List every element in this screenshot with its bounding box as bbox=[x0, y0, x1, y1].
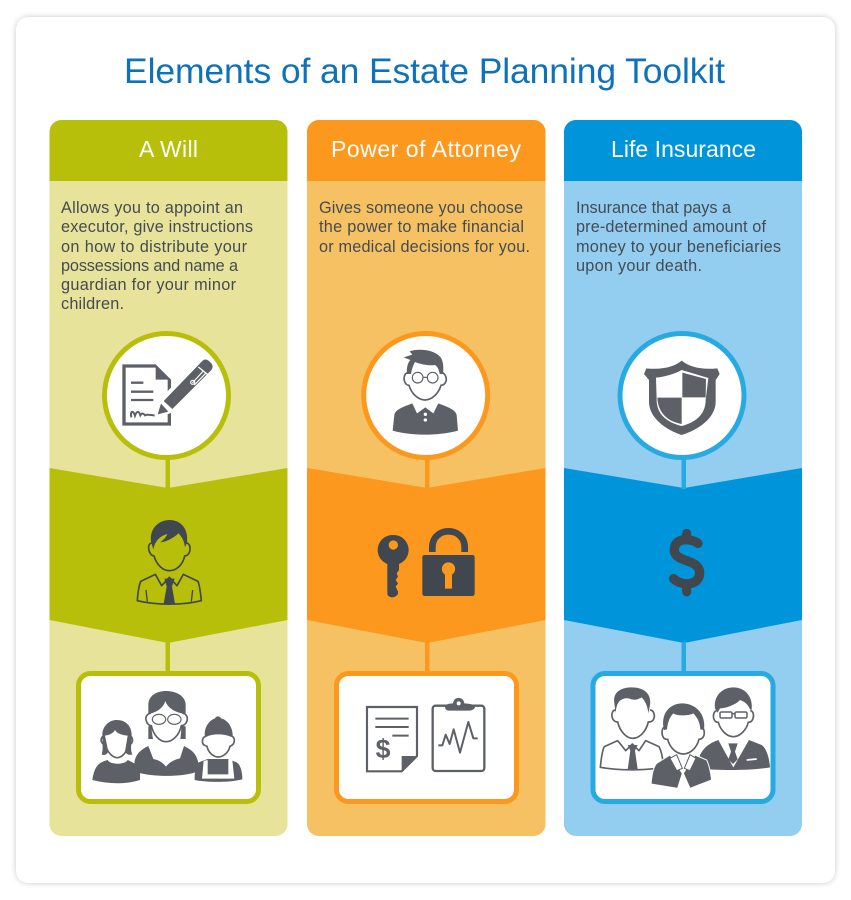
description: life insurance: Insurance that pays a bbox=[576, 199, 732, 217]
icon: padlock bbox=[422, 531, 475, 596]
icon: man with glasses bbox=[393, 350, 458, 435]
panel: life insurance bbox=[564, 120, 802, 836]
header: a will bbox=[50, 120, 288, 181]
header: power of attorney: Power of Attorney bbox=[331, 136, 522, 162]
title: Elements of an Estate Planning Toolkit bbox=[124, 51, 725, 91]
description: life insurance: money to your beneficiaries bbox=[576, 238, 781, 256]
center man bbox=[651, 703, 712, 788]
description: life insurance bbox=[576, 199, 781, 275]
girl bbox=[92, 720, 140, 783]
right man with glasses bbox=[698, 687, 770, 770]
icon: family bbox=[92, 691, 242, 783]
connector: circle to band bbox=[166, 458, 170, 489]
panel background: power of attorney bbox=[307, 120, 546, 836]
chevron band: power of attorney bbox=[307, 468, 546, 643]
panel background: a will bbox=[50, 120, 288, 836]
circle badge: life insurance bbox=[620, 334, 744, 458]
description: a will: possessions and name a bbox=[61, 257, 239, 275]
description: life insurance: upon your death. bbox=[576, 257, 702, 275]
description: power of attorney: the power to make financial bbox=[319, 218, 524, 236]
panel background: life insurance bbox=[564, 120, 802, 836]
description: a will: executor, give instructions bbox=[61, 218, 253, 236]
description: a will bbox=[61, 199, 253, 313]
header: life insurance bbox=[564, 120, 802, 181]
description: power of attorney: or medical decisions for you. bbox=[319, 238, 530, 256]
icon: shield bbox=[644, 361, 720, 435]
photo box: power of attorney bbox=[336, 674, 516, 802]
description: life insurance: pre-determined amount of bbox=[576, 218, 766, 236]
photo box: life insurance bbox=[593, 674, 773, 802]
icon: bill with dollar sign: $ bbox=[376, 734, 391, 764]
boy with cap bbox=[195, 716, 242, 782]
panel: a will bbox=[50, 120, 288, 836]
photo box: a will bbox=[78, 674, 258, 802]
description: power of attorney bbox=[319, 199, 530, 256]
icon: three business people bbox=[600, 687, 770, 788]
connector: band to box bbox=[166, 640, 170, 673]
description: a will: children. bbox=[61, 295, 124, 313]
connector: circle to band bbox=[682, 458, 686, 489]
icon: bill with dollar sign bbox=[367, 707, 417, 771]
left man bbox=[600, 687, 663, 770]
connector: circle to band bbox=[425, 458, 430, 489]
panel: power of attorney bbox=[307, 120, 546, 836]
connector: band to box bbox=[682, 642, 686, 673]
icon: key bbox=[378, 535, 409, 597]
icon: dollar sign bbox=[674, 533, 700, 592]
icon: clipboard with chart bbox=[433, 698, 484, 771]
description: a will: on how to distribute your bbox=[61, 238, 248, 256]
header: power of attorney bbox=[307, 120, 546, 181]
chevron band: life insurance bbox=[564, 468, 802, 643]
description: power of attorney: Gives someone you choose bbox=[319, 199, 523, 217]
circle badge: power of attorney bbox=[364, 334, 488, 458]
circle badge: a will bbox=[104, 334, 228, 458]
description: a will: guardian for your minor bbox=[61, 276, 237, 294]
connector: band to box bbox=[425, 640, 430, 673]
woman with glasses bbox=[134, 691, 198, 776]
header: life insurance: Life Insurance bbox=[611, 136, 756, 162]
icon: document and pen bbox=[122, 356, 216, 426]
icon: man with tie bbox=[137, 520, 201, 604]
chevron band: a will bbox=[50, 468, 288, 643]
description: a will: Allows you to appoint an bbox=[61, 199, 243, 217]
header: a will: A Will bbox=[139, 136, 198, 162]
